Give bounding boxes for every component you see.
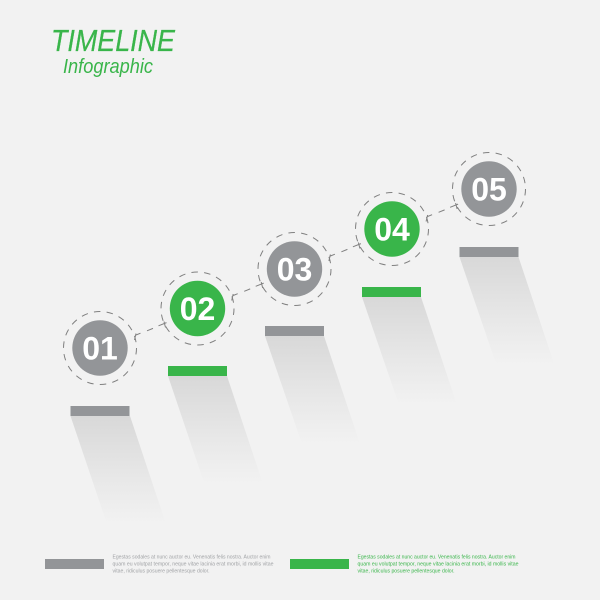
- circle 03: [267, 241, 322, 297]
- legend text green: quam eu volutpat tempor, neque vitae lacinia erat morbi, id mollis vitae: [358, 562, 519, 568]
- legend: green: [290, 554, 519, 574]
- circle 02: [170, 281, 225, 336]
- connector: 04 to 05: [426, 203, 458, 222]
- legend text green: Egestas sodales at nunc auctor eu. Venenatis felis nostra. Auctor enim: [358, 554, 516, 560]
- legend text grey: Egestas sodales at nunc auctor eu. Venenatis felis nostra. Auctor enim: [112, 554, 271, 560]
- bar 02: [168, 366, 227, 376]
- legend text grey: quam eu volutpat tempor, neque vitae lacinia erat morbi, id mollis vitae: [112, 562, 274, 568]
- title: Infographic: [63, 56, 153, 78]
- legend swatch green: [290, 559, 349, 569]
- circle 04: [364, 201, 420, 257]
- connector: 03 to 04: [329, 242, 361, 261]
- connector: 01 to 02: [134, 322, 166, 340]
- number 01: 01: [82, 330, 118, 366]
- shadow 04: [362, 297, 457, 405]
- ring 04: [356, 192, 428, 266]
- number 05: 05: [471, 172, 507, 208]
- shadow 01: [70, 416, 166, 524]
- bar 03: [265, 326, 324, 336]
- shadow 03: [265, 336, 360, 444]
- step 01: [64, 312, 166, 524]
- bar 05: [460, 247, 518, 257]
- legend text grey: vitae, ridiculus posuere pellentesque dolor.: [112, 568, 210, 574]
- ring 01: [64, 312, 136, 384]
- step 04: [356, 192, 457, 405]
- step 05: [452, 152, 554, 365]
- ring 05: [452, 152, 526, 226]
- shadow 02: [168, 376, 263, 484]
- bar 04: [362, 287, 421, 297]
- legend text green: [358, 554, 519, 574]
- ring 02: [161, 272, 234, 345]
- circle 05: [461, 161, 517, 217]
- title: TIMELINE: [51, 24, 176, 58]
- legend text grey: [112, 554, 274, 574]
- number 02: 02: [180, 291, 215, 327]
- legend swatch grey: [45, 559, 104, 569]
- step 02: [161, 272, 263, 484]
- ring 03: [258, 232, 331, 306]
- legend: grey: [45, 554, 274, 574]
- bar 01: [70, 406, 130, 416]
- title: [51, 24, 176, 78]
- circle 01: [72, 320, 128, 376]
- connector: 02 to 03: [232, 282, 264, 300]
- step 03: [258, 232, 360, 444]
- shadow 05: [460, 257, 554, 365]
- legend text green: vitae, ridiculus posuere pellentesque dolor.: [358, 568, 454, 574]
- number 03: 03: [277, 252, 312, 288]
- number 04: 04: [374, 212, 410, 248]
